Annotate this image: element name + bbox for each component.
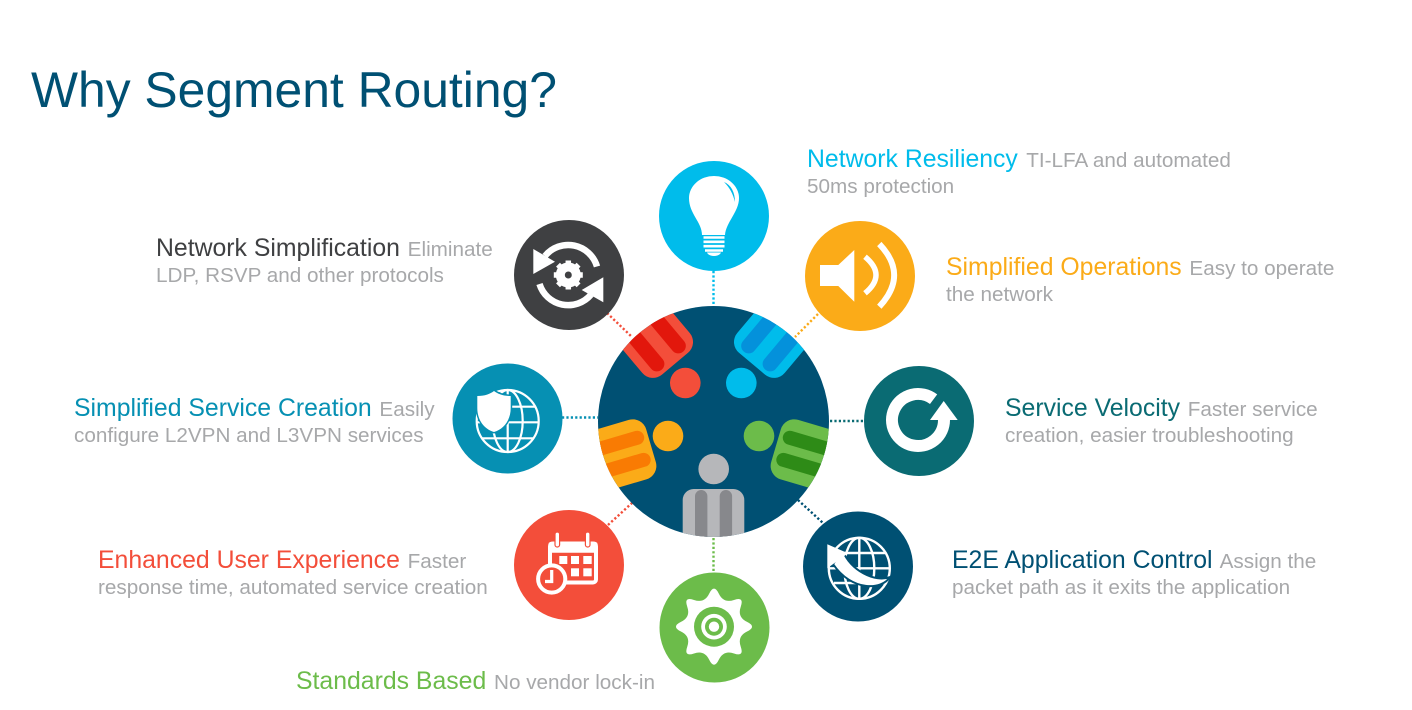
red dot: [670, 368, 701, 398]
green hand: [770, 419, 829, 488]
icon: cog with target: [660, 572, 770, 682]
person: [682, 454, 744, 537]
icon: sync gear: [514, 220, 624, 330]
icon: calendar and clock: [514, 510, 624, 620]
blue dot: [726, 368, 757, 398]
label: e2e application control: packet path as it exits the application: [952, 576, 1290, 599]
label: enhanced user experience: response time, automated service creation: [98, 576, 488, 599]
label: standards based: Standards Based No vendor lock-in: [296, 668, 655, 695]
orange dot: [653, 421, 683, 451]
label: service velocity: Service Velocity Faster service: [1005, 395, 1318, 422]
label: simplified service creation: configure L2VPN and L3VPN services: [74, 424, 424, 447]
blue hand: [734, 313, 804, 378]
label: simplified operations: the network: [946, 283, 1054, 306]
label: network resiliency: Network Resiliency TI-LFA and automated: [807, 146, 1231, 173]
green dot: [744, 421, 774, 451]
label: enhanced user experience: Enhanced User Experience Faster: [98, 547, 466, 574]
label: simplified service creation: Simplified Service Creation Easily: [74, 395, 435, 422]
label: e2e application control: E2E Application Control Assign the: [952, 547, 1316, 574]
icon: light bulb: [659, 161, 769, 271]
label: service velocity: creation, easier troubleshooting: [1005, 424, 1294, 447]
icon: speaker: [805, 221, 915, 331]
icon: globe with arrow: [803, 512, 913, 622]
red hand: [623, 313, 693, 378]
label: network simplification: Network Simplification Eliminate: [156, 235, 493, 262]
orange hand: [598, 419, 656, 488]
title: Why Segment Routing?: [31, 62, 557, 118]
label: network simplification: LDP, RSVP and other protocols: [156, 264, 444, 287]
icon: shield and globe: [452, 364, 562, 474]
label: simplified operations: Simplified Operations Easy to operate: [946, 254, 1334, 281]
icon: velocity arrow: [864, 366, 974, 476]
central hub: [598, 306, 829, 537]
label: network resiliency: 50ms protection: [807, 175, 954, 198]
